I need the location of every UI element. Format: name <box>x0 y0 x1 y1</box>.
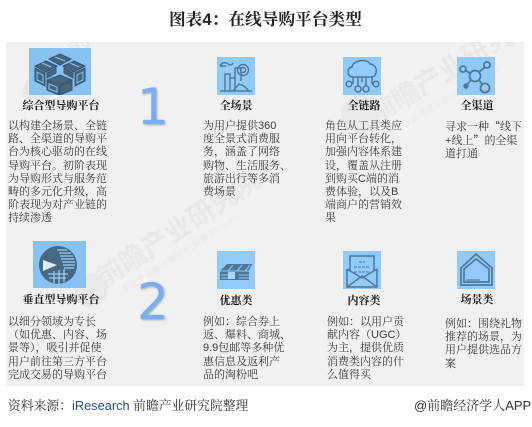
heading: coupon: 优惠类 <box>220 295 252 307</box>
text: full chain <box>325 120 402 224</box>
text: vertical: 用户前往第三方平台 <box>8 356 107 368</box>
heading: vertical: 垂直型导购平台 <box>22 294 100 306</box>
text: full chain: 角色从工具类应 <box>325 120 402 132</box>
watermark: 前瞻产业研究院 <box>91 165 266 293</box>
text: content: 消费类内容的什 <box>327 356 404 368</box>
text: full chain: 设，覆盖从注册 <box>325 160 402 172</box>
text: full chain: 果 <box>325 212 336 224</box>
watermark: 中国产业咨询领导者(股票:833990) <box>376 63 500 144</box>
text: full chain: 费体验，以及B <box>325 186 398 198</box>
source: 资料来源：iResearch 前瞻产业研究院整理 <box>8 398 248 413</box>
text: comprehensive: 阶表现为对产业链的 <box>8 199 107 211</box>
text: scene type: 推荐的场景，为 <box>445 331 522 343</box>
text: full chain: 到购买C端的消 <box>325 173 399 185</box>
text: coupon: 例如：综合券上 <box>203 316 280 328</box>
text: full chain: 端商户的营销效 <box>325 199 402 211</box>
panel: platform types <box>6 42 524 386</box>
text: coupon: 惠信息及返利产 <box>203 356 280 368</box>
text: comprehensive: 以构建全场景、全链 <box>8 120 107 132</box>
text: all channel: +线上”的全渠 <box>445 132 517 148</box>
icon: house <box>457 251 495 289</box>
heading: comprehensive: 综合型导购平台 <box>22 100 100 112</box>
text: content <box>327 316 406 381</box>
heading: all scene: 全场景 <box>220 100 252 112</box>
text: all scene: 旅游出行等多消 <box>203 173 280 185</box>
text: all scene: 度全景式消费服 <box>203 133 280 145</box>
text: all channel: 寻求一种“线下 <box>445 118 522 134</box>
heading: content: 内容类 <box>348 295 380 307</box>
text: content: 例如：以用户贡 <box>327 316 404 328</box>
text: vertical: （如优惠、内容、场 <box>8 329 107 341</box>
text: content: 献内容（UGC） <box>327 329 406 341</box>
text: all scene <box>203 120 291 198</box>
text: coupon: 返、爆料、商城、 <box>203 329 291 341</box>
text: scene type: 例如：围绕礼物 <box>445 318 522 330</box>
text: comprehensive: 路、全渠道的导购平 <box>8 133 107 145</box>
text: all channel: 道打通 <box>445 148 478 160</box>
text: all scene: 购物、生活服务、 <box>203 160 291 172</box>
icon: scene <box>217 57 255 95</box>
text: full chain: 用向平台转化， <box>325 133 402 145</box>
icon: envelope <box>343 251 381 289</box>
heading: all channel: 全渠道 <box>460 100 494 112</box>
text: vertical <box>8 316 107 381</box>
watermark <box>61 42 524 296</box>
text: vertical: 以细分领域为专长 <box>8 316 96 328</box>
text: content: 么值得买 <box>327 369 371 381</box>
icon: cash stack <box>217 251 255 289</box>
text: comprehensive: 导购平台。初阶表现 <box>8 160 107 172</box>
watermark: 中国产业咨询领导者(股票:833990) <box>119 212 240 296</box>
icon: network <box>457 57 495 95</box>
text: comprehensive <box>8 120 107 224</box>
credit: @前瞻经济学人APP <box>414 398 531 413</box>
text: coupon <box>203 316 291 381</box>
text: vertical: 景等），吸引并促使 <box>8 342 102 354</box>
text: comprehensive: 畴的多元化升级，高 <box>8 186 107 198</box>
text: all scene: 费场景 <box>203 186 236 198</box>
text: scene type: 案 <box>445 358 456 370</box>
text: all scene: 务，涵盖了网络 <box>203 146 280 158</box>
icon: cloud <box>343 57 381 95</box>
text: scene type <box>445 318 522 370</box>
text: comprehensive: 持续渗透 <box>8 212 52 224</box>
text: comprehensive: 台为核心驱动的在线 <box>8 146 107 158</box>
number 2: 2 <box>137 273 169 331</box>
text: content: 为主，提供优质 <box>327 342 404 354</box>
text: scene type: 用户提供选品方 <box>445 344 522 356</box>
text: all scene: 为用户提供360 <box>203 120 276 132</box>
icon: pie chart <box>33 241 86 288</box>
text: all channel <box>445 118 522 160</box>
text: full chain: 加强内容体系建 <box>325 146 402 158</box>
heading: scene type: 场景类 <box>460 294 494 306</box>
heading: full chain: 全链路 <box>348 100 380 112</box>
title: 图表4：在线导购平台类型 <box>169 10 362 29</box>
text: vertical: 完成交易的导购平台 <box>8 369 107 381</box>
number 1: 1 <box>137 78 169 136</box>
text: comprehensive: 为导购形式与服务范 <box>8 173 107 185</box>
text: coupon: 9.9包邮等多种优 <box>203 342 284 354</box>
text: coupon: 品的淘粉吧 <box>203 369 258 381</box>
icon: boxes <box>29 48 91 95</box>
